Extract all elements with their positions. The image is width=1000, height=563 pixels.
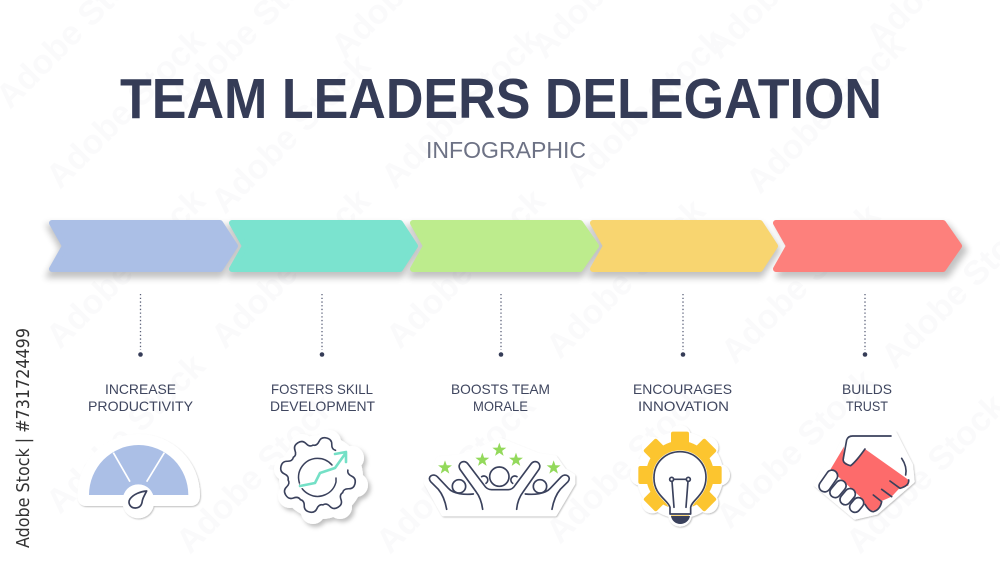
watermark pattern: Adobe Stock: [379, 182, 553, 356]
watermark pattern: Adobe Stock: [539, 377, 713, 551]
title: TEAM LEADERS DELEGATION: [120, 67, 882, 131]
icon: light bulb in gear: [630, 425, 730, 527]
label: boosts team morale: [451, 382, 550, 414]
connector 1: [138, 294, 143, 357]
watermark pattern: Adobe Stock: [39, 347, 213, 521]
label: encourages innovation: ENCOURAGES: [633, 382, 732, 397]
subtitle: INFOGRAPHIC: [426, 137, 586, 163]
label: boosts team morale: BOOSTS TEAM: [451, 382, 550, 397]
watermark pattern: Adobe Stock: [39, 22, 213, 196]
label: builds trust: [842, 382, 892, 414]
label: encourages innovation: [633, 382, 732, 414]
icon: speedometer gauge: [77, 434, 200, 518]
label: builds trust: BUILDS: [842, 382, 892, 397]
label: fosters skill development: FOSTERS SKILL: [271, 382, 373, 397]
watermark pattern: Adobe Stock: [709, 362, 883, 536]
chevron 1: [52, 223, 235, 269]
watermark pattern: Adobe Stock: [204, 47, 378, 221]
arrow chevrons: [45, 223, 968, 278]
label: fosters skill development: [270, 382, 375, 414]
chevron 5: [776, 223, 959, 269]
watermark pattern: Adobe Stock: [39, 182, 213, 356]
icon: team with stars: [426, 439, 573, 514]
watermark pattern: Adobe Stock: [559, 22, 733, 196]
connector 4: [681, 294, 685, 357]
connector 2: [320, 294, 324, 357]
chevron 4: [593, 223, 775, 269]
connector 5: [863, 294, 867, 357]
label: increase productivity: PRODUCTIVITY: [88, 399, 193, 414]
icon: gear with growth arrow: [274, 430, 368, 524]
label: encourages innovation: INNOVATION: [638, 399, 729, 414]
watermark pattern: Adobe Stock: [714, 197, 888, 371]
icon: handshake: [815, 432, 913, 518]
chevron 3: [413, 223, 596, 269]
watermark pattern: Adobe Stock: [374, 22, 548, 196]
watermark pattern: Adobe Stock: [739, 27, 913, 201]
label: fosters skill development: DEVELOPMENT: [270, 399, 375, 414]
connector 3: [499, 294, 503, 357]
label: builds trust: TRUST: [846, 399, 888, 414]
label: boosts team morale: MORALE: [473, 399, 528, 414]
label: increase productivity: INCREASE: [105, 382, 176, 397]
watermark pattern: Adobe Stock: [369, 387, 543, 561]
watermark pattern: Adobe Stock: [539, 192, 713, 366]
watermark pattern: Adobe Stock: [169, 387, 343, 561]
watermark pattern: Adobe Stock: [204, 182, 378, 356]
label: increase productivity: [88, 382, 193, 414]
chevron shadows: [45, 224, 968, 278]
chevron 2: [232, 223, 415, 269]
stock id vertical text: Adobe Stock | #731724499: [14, 328, 34, 548]
